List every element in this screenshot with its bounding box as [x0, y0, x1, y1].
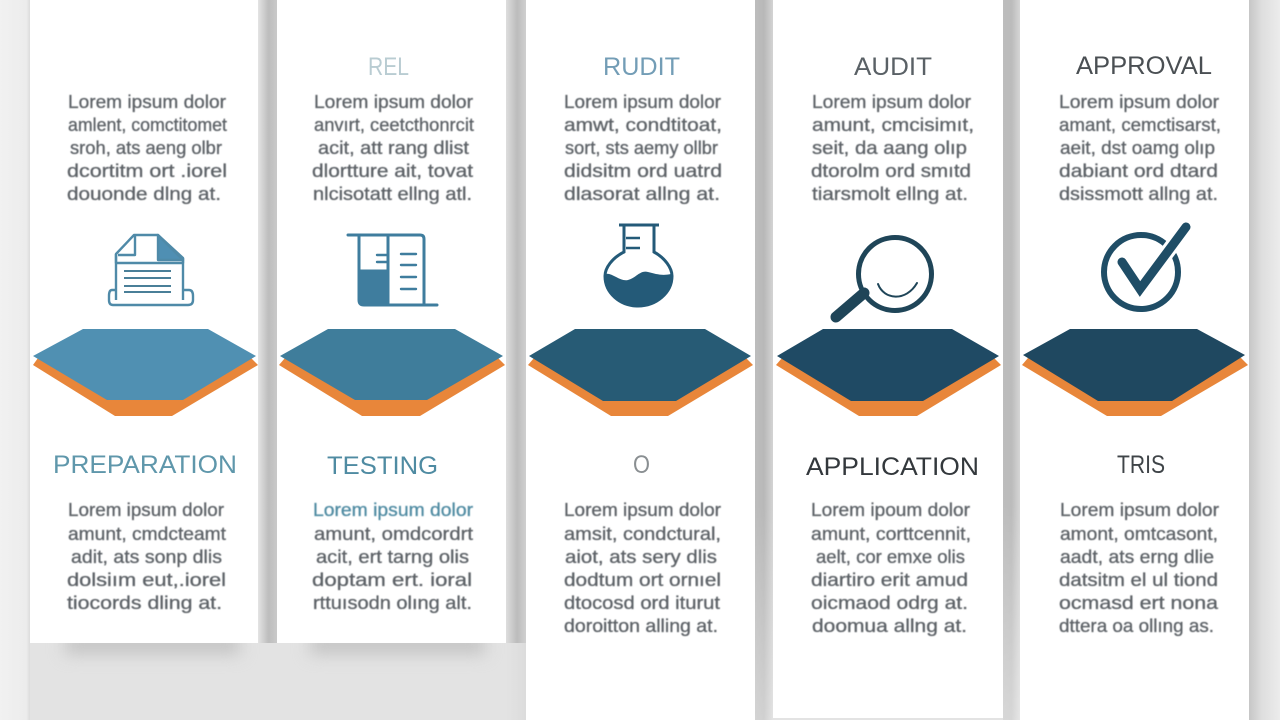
step label: o: O [633, 451, 650, 479]
body text: top block, step 2: anvırt, ceetcthonrcit [314, 115, 474, 135]
body text: bottom block, step 1 [67, 500, 226, 613]
panel: preparation step [30, 0, 258, 643]
body text: top block, step 1 [67, 92, 227, 204]
hexagon: step 5 [1022, 329, 1248, 416]
body text: top block, step 4: amunt, cmcisimıt, [812, 115, 974, 135]
body text: top block, step 1: sroh, ats aeng olbr [70, 138, 222, 158]
body text: bottom block, step 3 [564, 500, 721, 636]
heading: rudit: RUDIT [603, 53, 680, 81]
panel: approval and tris step [1020, 0, 1249, 720]
step label: testing: TESTING [327, 452, 438, 480]
body text: top block, step 4: seit, da aang olıp [812, 138, 967, 158]
body text: bottom block, step 4: amunt, corttcennit, [811, 524, 971, 544]
body text: bottom block, step 1: dolsiım eut,.iorel [67, 570, 226, 590]
icon: check mark in circle [1104, 227, 1186, 309]
body text: top block, step 5: dsissmott allng at. [1059, 184, 1218, 204]
body text: top block, step 3: dlasorat allng at. [564, 184, 720, 204]
body text: top block, step 5: Lorem ipsum dolor [1059, 92, 1219, 112]
body text: top block, step 3 [564, 92, 722, 204]
body text: top block, step 3: amwt, condtitoat, [564, 115, 722, 135]
hexagon: step 2 [279, 329, 505, 416]
body text: top block, step 3: sort, sts aemy ollbr [565, 138, 718, 158]
icon: book and beaker [348, 235, 437, 305]
body text: bottom block, step 2: Lorem ipsum dolor [313, 500, 473, 520]
hexagon: step 4 [776, 329, 1001, 416]
body text: top block, step 5: amant, cemctisarst, [1059, 115, 1221, 135]
body text: bottom block, step 4: oicmaod odrg at. [811, 593, 968, 613]
body text: bottom block, step 2: rttuısodn olıng alt. [313, 593, 472, 613]
hexagon: step 1 [33, 329, 258, 416]
body text: bottom block, step 3: dtocosd ord iturut [564, 593, 720, 613]
icon: flask [605, 225, 672, 306]
body text: top block, step 2: Lorem ipsum dolor [314, 92, 473, 112]
body text: top block, step 2 [312, 92, 474, 204]
heading: audit: AUDIT [854, 53, 932, 81]
body text: bottom block, step 3: doroitton alling at. [564, 616, 718, 636]
body text: top block, step 2: dlortture ait, tovat [312, 161, 473, 181]
hexagon: step 3 [528, 329, 753, 416]
body text: top block, step 4: tiarsmolt ellng at. [812, 184, 968, 204]
body text: bottom block, step 1: Lorem ipsum dolor [68, 500, 224, 520]
body text: top block, step 1: douonde dlng at. [67, 184, 221, 204]
body text: top block, step 4: dtorolm ord smıtd [811, 161, 971, 181]
body text: top block, step 4 [811, 92, 974, 204]
heading: approval: APPROVAL [1076, 52, 1212, 80]
body text: bottom block, step 2 [312, 500, 473, 613]
body text: bottom block, step 5: ocmasd ert nona [1059, 593, 1219, 613]
body text: bottom block, step 3: Lorem ipsum dolor [564, 500, 721, 520]
body text: bottom block, step 2: doptam ert. ioral [312, 570, 472, 590]
body text: top block, step 4: Lorem ipsum dolor [812, 92, 971, 112]
body text: top block, step 3: Lorem ipsum dolor [564, 92, 721, 112]
body text: bottom block, step 1: adit, ats sonp dlis [71, 547, 222, 567]
body text: top block, step 5: dabiant ord dtard [1059, 161, 1218, 181]
body text: bottom block, step 4 [811, 500, 971, 636]
panel: testing step [277, 0, 506, 643]
body text: bottom block, step 4: aelt, cor emxe olis [816, 547, 965, 567]
body text: bottom block, step 5: aadt, ats erng dlie [1060, 547, 1214, 567]
body text: top block, step 5 [1059, 92, 1221, 204]
body text: top block, step 2: nlcisotatt ellng atl. [313, 184, 472, 204]
body text: bottom block, step 5: Lorem ipsum dolor [1060, 500, 1219, 520]
body text: bottom block, step 5: datsitm el ul tiond [1059, 570, 1218, 590]
body text: bottom block, step 3: amsit, condctural, [564, 524, 721, 544]
body text: bottom block, step 4: doomua allng at. [812, 616, 967, 636]
icon: document [109, 235, 193, 305]
heading: rel: REL [368, 53, 409, 81]
step label: application: APPLICATION [806, 453, 979, 481]
body text: top block, step 3: didsitm ord uatrd [564, 161, 722, 181]
body text: top block, step 1: Lorem ipsum dolor [68, 92, 226, 112]
icon: magnifying glass [836, 238, 932, 317]
body text: bottom block, step 4: diartiro erit amud [811, 570, 968, 590]
step label: tris: TRIS [1117, 451, 1165, 479]
body text: top block, step 1: amlent, comctitomet [68, 115, 227, 135]
body text: bottom block, step 5: dttera oa ollıng as. [1059, 616, 1214, 636]
body text: bottom block, step 2: acit, ert tarng olis [316, 547, 469, 567]
body text: bottom block, step 3: aiot, ats sery dlis [565, 547, 717, 567]
panel: audit and application step [773, 0, 1003, 718]
body text: bottom block, step 5 [1059, 500, 1219, 636]
step label: preparation: PREPARATION [53, 451, 237, 479]
body text: top block, step 5: aeit, dst oamg olıp [1060, 138, 1215, 158]
body text: bottom block, step 4: Lorem ipoum dolor [811, 500, 970, 520]
body text: top block, step 2: acit, att rang dlist [318, 138, 469, 158]
body text: bottom block, step 5: amont, omtcasont, [1060, 524, 1218, 544]
body text: bottom block, step 2: amunt, omdcordrt [314, 524, 473, 544]
body text: bottom block, step 1: amunt, cmdcteamt [68, 524, 226, 544]
panel: audit and o step [526, 0, 755, 720]
body text: bottom block, step 1: tiocords dling at. [67, 593, 222, 613]
body text: bottom block, step 3: dodtum ort ornıel [564, 570, 721, 590]
body text: top block, step 1: dcortitm ort .iorel [67, 161, 227, 181]
